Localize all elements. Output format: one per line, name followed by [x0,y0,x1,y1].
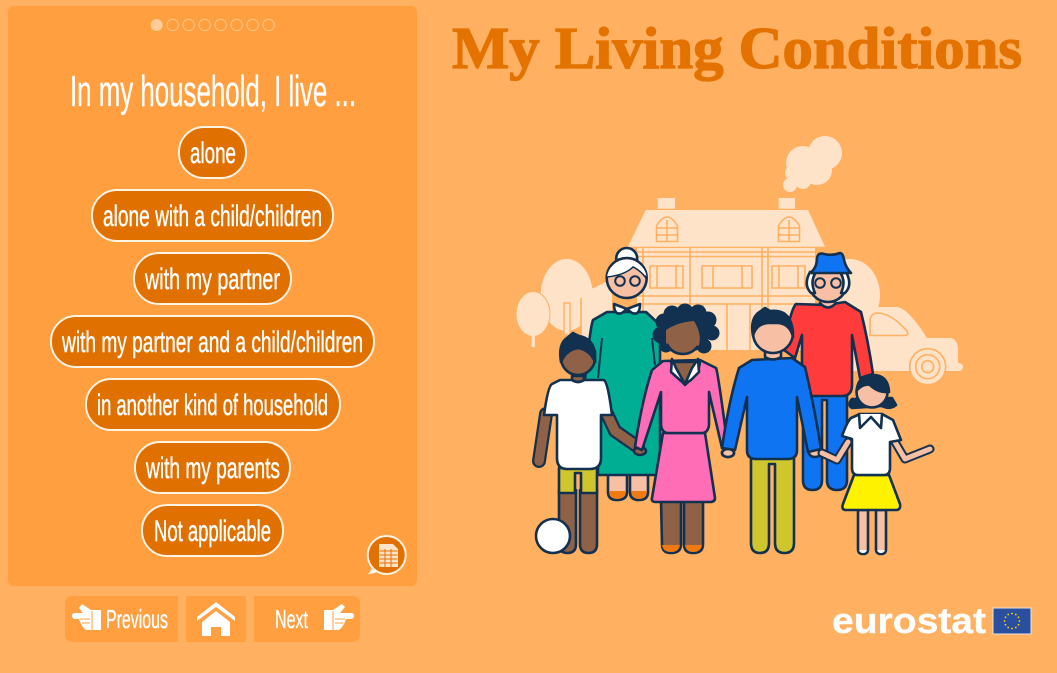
answer button: alone with a child/children [92,190,333,241]
icon: hand pointing left [72,604,101,630]
answer button: with my partner and a child/children: with my partner and a child/children [61,326,363,359]
background: house [573,198,825,350]
background: car [850,307,963,385]
person: grandfather [784,253,873,490]
icon: hand pointing right [324,604,354,630]
panel: question [8,6,417,586]
answer button: in another kind of household: in another kind of household [97,389,328,422]
answer button: with my partner and a child/children [51,316,374,367]
nav button: previous: Previous [106,604,168,634]
background: trees [516,259,880,347]
answer button: with my parents [135,442,290,493]
nav button: previous [65,596,178,642]
answer button: alone: alone [190,137,236,170]
answer button: with my parents: with my parents [145,452,280,485]
hair curls [652,304,720,354]
ball [536,519,570,553]
nav button: home [186,596,246,642]
answer button: in another kind of household [86,379,340,430]
nav button: next: Next [275,604,308,634]
answer button: with my partner [134,253,291,304]
person: grandmother [585,248,670,500]
answer button: alone with a child/children: alone with a child/children [103,200,322,233]
question heading: In my household, I live ... [70,67,356,116]
answer button: with my partner: with my partner [144,263,280,296]
person: man in blue [722,308,821,553]
background: smoke [783,136,842,192]
illustration: family in front of house [516,136,963,554]
icon: EU flag [993,608,1031,634]
logo: eurostat: eurostat [832,600,986,641]
person: boy with ball [536,333,638,553]
answer button: alone [179,127,246,178]
person: woman in pink [634,304,734,553]
nav button: next [254,596,360,642]
person: girl in yellow skirt [822,375,930,554]
icon: data table speech bubble [368,536,406,574]
icon: home [197,602,235,636]
progress dots [151,19,274,31]
answer button: not applicable [142,505,283,556]
answer button: not applicable: Not applicable [154,515,271,548]
title: My Living Conditions [452,15,1022,81]
